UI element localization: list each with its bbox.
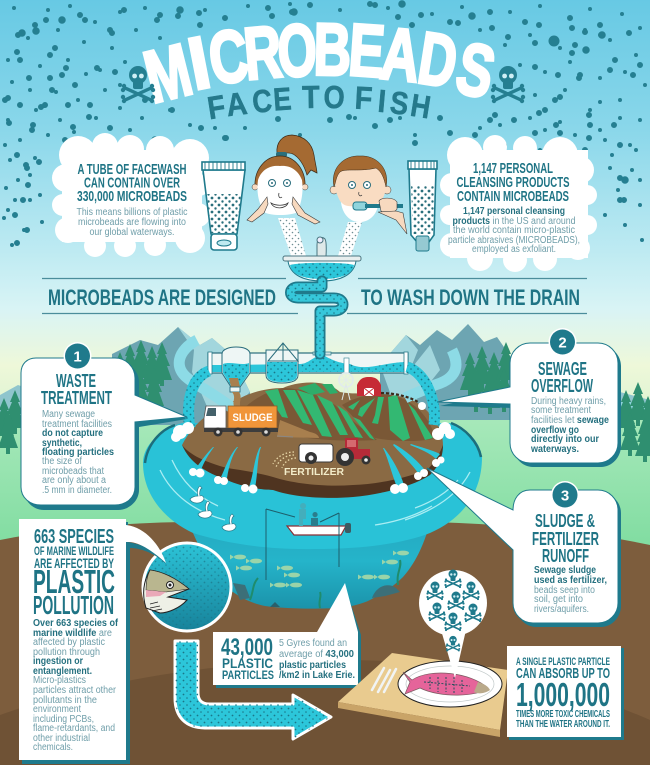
panel: 43,000 plastic particles: 5 Gyres found an	[279, 638, 347, 649]
text: facewash fact: This means billions of plastic	[76, 207, 188, 218]
subtitle: O	[323, 80, 345, 116]
panel: 43,000 plastic particles: PARTICLES	[222, 670, 274, 682]
callout 2: sewage overflow	[437, 328, 621, 467]
panel: 663 species: Micro-plastics	[33, 675, 86, 686]
panel: 663 species: other industrial	[33, 733, 90, 744]
right mountains	[380, 324, 520, 420]
deeper soil band	[0, 660, 650, 765]
plate	[398, 661, 502, 707]
drain pipe	[290, 281, 343, 354]
text: facewash fact: microbeads are flowing into	[78, 217, 186, 228]
callout 1: waste treatment: floating particles	[42, 447, 114, 458]
title: B	[313, 7, 352, 92]
number badge 3: 3	[561, 488, 569, 504]
icon: left skull	[121, 66, 155, 103]
light streams behind plant	[179, 340, 456, 408]
callout 2: sewage overflow: facilities let sewage	[531, 415, 609, 426]
callout 2: sewage overflow: SEWAGE	[538, 359, 587, 379]
settling tank	[222, 347, 250, 387]
callout 1: waste treatment: do not capture	[42, 428, 103, 439]
panel: 43,000 plastic particles: plastic particles	[279, 660, 346, 671]
text: personal products fact	[448, 160, 580, 255]
panel: 663 species: pollutants in the	[33, 695, 97, 706]
subtitle: F	[354, 80, 373, 117]
panel: 663 species: affected by plastic	[33, 637, 105, 648]
text: personal products fact: particle abrasives (MICROBEADS),	[448, 235, 580, 246]
headline: designed to wash down the drain	[48, 285, 580, 310]
panel: 663 species: OF MARINE WILDLIFE	[34, 544, 114, 558]
callout 3: sludge and fertilizer runoff	[427, 468, 621, 627]
panel: 663 species: including PCBs,	[33, 714, 94, 725]
background sky	[0, 0, 650, 430]
icon: right skull	[491, 66, 525, 103]
callout 1: waste treatment: microbeads that	[42, 466, 104, 477]
cutting board with plated fish	[338, 653, 508, 737]
text: personal products fact: CONTAIN MICROBEADS	[457, 188, 569, 205]
callout 3: sludge and fertilizer runoff: RUNOFF	[542, 546, 589, 566]
lake strip far right	[600, 402, 650, 418]
title: I	[182, 22, 217, 106]
title: O	[276, 10, 318, 93]
panel: 663 species: PLASTIC	[33, 563, 115, 600]
subtitle: T	[302, 79, 320, 116]
panel: 43,000 plastic particles	[213, 583, 361, 688]
pine forests	[0, 340, 650, 462]
callout 1: waste treatment: Many sewage	[42, 409, 95, 420]
arms dotted with beads	[278, 218, 362, 256]
panel: 663 species: entanglement.	[33, 666, 92, 677]
panel: 663 species: chemicals.	[33, 742, 73, 753]
number badge 3	[551, 481, 579, 509]
callout 1: waste treatment: the size of	[42, 456, 82, 467]
panel: 43,000 plastic particles: average of 43,000	[279, 649, 354, 660]
callout 2: sewage overflow: some treatment	[531, 405, 591, 416]
tractor label: FERTILIZER	[284, 466, 344, 478]
panel: 663 species: particles attract other	[33, 685, 117, 696]
brown soil	[0, 522, 650, 765]
panel: 43,000 plastic particles: PLASTIC	[222, 655, 273, 671]
callout 3: sludge and fertilizer runoff: Sewage sludge	[534, 565, 596, 576]
title: R	[241, 9, 285, 96]
sink with faucet	[283, 237, 361, 281]
title: M	[136, 28, 199, 119]
callout 2: sewage overflow: overflow go	[531, 425, 579, 436]
island	[182, 382, 443, 498]
water overflow arcs	[171, 367, 455, 442]
callout 2: sewage overflow: During heavy rains,	[531, 396, 606, 407]
headline: designed to wash down the drain: MICROBEADS ARE DESIGNED	[48, 285, 276, 310]
fishing boat	[266, 503, 351, 580]
callout 3: sludge and fertilizer runoff: FERTILIZER	[532, 529, 599, 549]
panel: 663 species: marine wildlife are	[33, 628, 112, 639]
number badge 2	[548, 328, 576, 356]
truck label: SLUDGE	[232, 412, 272, 424]
callout 3: sludge and fertilizer runoff: beads seep into	[534, 585, 595, 596]
cloud: personal products	[440, 135, 597, 272]
text: facewash fact: A TUBE OF FACEWASH	[78, 161, 186, 178]
subtitle	[205, 79, 433, 127]
filter tank	[266, 350, 298, 383]
number badge 2: 2	[558, 334, 567, 352]
text: facewash fact: CAN CONTAIN OVER	[84, 174, 180, 192]
sludge truck	[204, 406, 278, 436]
title	[136, 7, 502, 119]
callout 1: waste treatment	[21, 342, 187, 510]
barn and windmill	[339, 373, 418, 402]
fertilizer tractor	[273, 438, 370, 478]
cloud: facewash	[52, 133, 210, 257]
subtitle: H	[408, 88, 433, 126]
subtitle: A	[224, 86, 249, 124]
subtitle: I	[376, 83, 387, 120]
subtitle: F	[205, 89, 228, 127]
foam	[171, 402, 455, 442]
callout 1: waste treatment: .5 mm in diameter.	[42, 485, 112, 496]
treatment plant pipe	[208, 343, 408, 408]
text: facewash fact	[76, 161, 188, 238]
callout 3: sludge and fertilizer runoff: soil, get into	[534, 594, 583, 605]
text: personal products fact: 1,147 personal cleansing	[463, 206, 565, 217]
subtitle: E	[272, 81, 293, 118]
title: A	[377, 12, 424, 98]
ducks	[190, 486, 236, 531]
callout 3: sludge and fertilizer runoff: rivers/aquifers.	[534, 604, 589, 615]
number badge 1	[64, 342, 92, 370]
text: facewash fact: 330,000 MICROBEADS	[77, 188, 187, 205]
callout 3: sludge and fertilizer runoff: used as fertilizer,	[534, 575, 607, 586]
runoff streams	[189, 444, 444, 494]
cutlery	[372, 668, 396, 692]
number badge 1: 1	[73, 348, 82, 366]
arrow: fish to plate	[175, 641, 331, 739]
back hill stripes	[298, 383, 338, 395]
farm stripes right hill	[348, 395, 433, 441]
callout 1: waste treatment: are only about a	[42, 475, 106, 486]
panel: 663 species: flame-retardants, and	[33, 723, 115, 734]
text: personal products fact: products in the US and around	[452, 216, 576, 227]
callout 1: waste treatment: TREATMENT	[41, 388, 112, 408]
icon: toothpaste tube	[408, 161, 437, 251]
panel: 43,000 plastic particles: 43,000	[221, 634, 273, 661]
left mountains	[112, 327, 250, 425]
green meadow	[0, 412, 650, 552]
title: S	[449, 26, 502, 115]
text: personal products fact: employed as exfoliant.	[472, 244, 556, 255]
panel: 663 species	[19, 519, 166, 764]
subtitle: S	[388, 85, 410, 123]
callout 1: waste treatment: synthetic,	[42, 438, 82, 449]
panel: 663 species: Over 663 species of	[33, 618, 119, 629]
sludge falling	[232, 392, 241, 408]
callout 1: waste treatment: treatment facilities	[42, 419, 112, 430]
panel: 663 species: POLLUTION	[33, 590, 114, 620]
scattered microbeads	[4, 4, 645, 245]
callout 2: sewage overflow: waterways.	[530, 444, 579, 455]
girl washing face	[247, 135, 320, 224]
boy brushing teeth	[330, 156, 407, 234]
cooked fish	[403, 672, 488, 695]
panel: 43,000 plastic particles: /km2 in Lake Erie.	[279, 670, 355, 681]
title: E	[346, 8, 387, 93]
panel: 663 species: ingestion or	[33, 656, 83, 667]
title: C	[204, 13, 253, 101]
hills	[235, 388, 377, 441]
callout 3: sludge and fertilizer runoff: SLUDGE &	[535, 511, 595, 531]
subtitle: C	[251, 83, 273, 120]
callout 1: waste treatment: WASTE	[56, 371, 96, 391]
sludge pile	[277, 420, 319, 438]
callout 2: sewage overflow: OVERFLOW	[531, 376, 593, 396]
panel: 663 species: environment	[33, 704, 81, 715]
panel: 663 species: pollution through	[33, 647, 100, 658]
callout 2: sewage overflow: directly into our	[531, 434, 599, 445]
fish closeup circle	[143, 543, 231, 631]
icon: facewash tube	[202, 162, 245, 250]
pond	[143, 423, 482, 609]
text: personal products fact: 1,147 PERSONAL	[473, 160, 553, 177]
text: facewash fact: our global waterways.	[90, 227, 174, 238]
title: D	[413, 16, 463, 104]
text: personal products fact: the world contain micro-plastic	[453, 225, 575, 236]
farm stripes left hill	[265, 389, 375, 440]
panel: 663 species: ARE AFFECTED BY	[34, 555, 114, 571]
far hills	[0, 385, 650, 418]
speech bubble of toxic skulls	[419, 570, 487, 678]
panel: 663 species: 663 SPECIES	[34, 526, 114, 548]
text: personal products fact: CLEANSING PRODUCTS	[456, 174, 570, 191]
underwater life	[230, 550, 409, 608]
panel: single plastic particle	[507, 646, 624, 740]
